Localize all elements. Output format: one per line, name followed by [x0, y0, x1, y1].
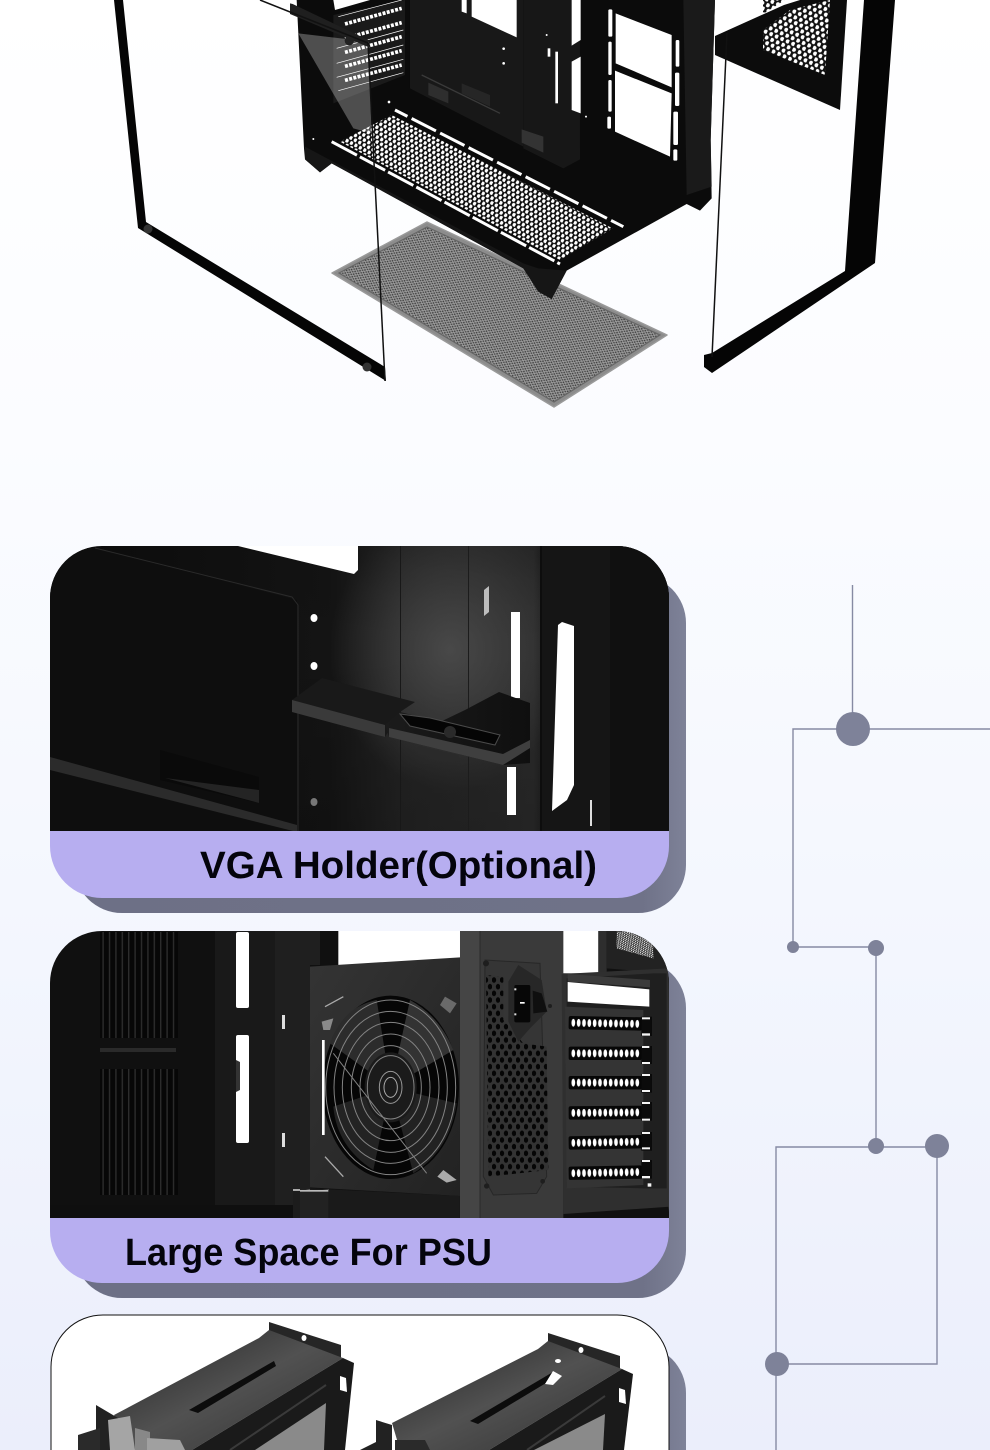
panel: VGA holder — [50, 510, 686, 913]
case chassis — [290, 0, 715, 299]
right panel with perforation — [704, 0, 895, 373]
case windows and cut-outs — [312, 0, 679, 161]
left glass frame — [114, 0, 386, 381]
photo card with drive brackets — [51, 1315, 669, 1450]
expansion slots — [333, 0, 405, 103]
caption band — [50, 831, 670, 901]
glass pane over slots — [298, 33, 372, 133]
dust filter — [332, 222, 667, 407]
honeycomb vents — [486, 975, 548, 1177]
right drive bracket — [360, 1333, 633, 1450]
front floor edge — [305, 147, 567, 299]
expansion brackets — [562, 968, 670, 1214]
caption: VGA Holder: VGA Holder(Optional) — [200, 845, 597, 887]
fan — [322, 996, 459, 1179]
photo: VGA holder bracket — [50, 546, 669, 898]
card drop shadow — [74, 1345, 686, 1450]
right column — [683, 0, 715, 195]
slot dots — [569, 1016, 652, 1187]
floor slits — [332, 110, 623, 264]
exploded PC case illustration — [114, 0, 895, 407]
caption: Large Space For PSU: Large Space For PSU — [125, 1232, 492, 1274]
center column — [523, 0, 580, 168]
power socket — [508, 965, 547, 1042]
PSU fan face — [310, 957, 460, 1196]
caption band — [50, 1218, 670, 1288]
card drop shadow — [74, 575, 686, 913]
photo: power supply bay — [50, 930, 683, 1288]
glass front edge line — [260, 0, 385, 381]
upper window — [338, 930, 460, 965]
rear window and top mesh — [563, 930, 598, 973]
card drop shadow — [74, 960, 686, 1298]
holder arm — [292, 687, 530, 765]
PSU back plate — [480, 931, 564, 1218]
panel: PSU space — [50, 930, 686, 1298]
circuit line decoration — [765, 585, 990, 1450]
left drive bracket — [78, 1322, 354, 1450]
panel: drive cages — [51, 1315, 686, 1450]
inner back wall — [410, 0, 523, 147]
floor perforation — [340, 115, 613, 260]
